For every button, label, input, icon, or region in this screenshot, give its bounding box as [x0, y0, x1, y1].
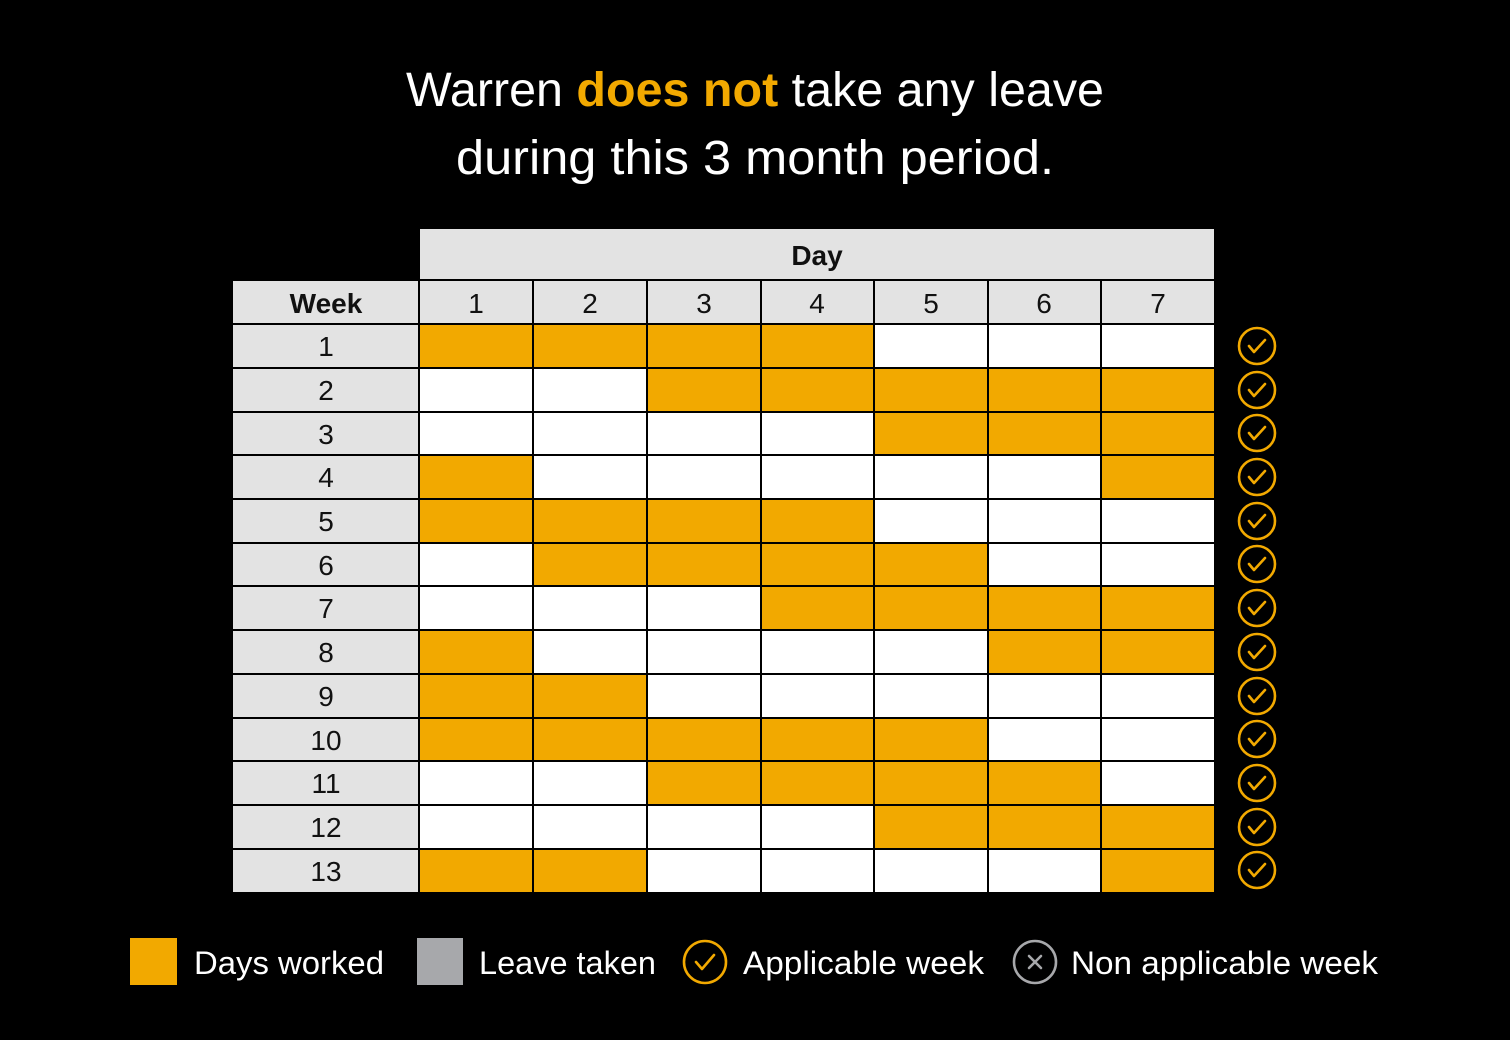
week 8	[420, 631, 1214, 673]
applicable week check icons	[1239, 328, 1275, 888]
title: Warren does not take any leave	[406, 64, 1104, 117]
legend: applicable week	[684, 941, 985, 983]
week 10	[420, 719, 1214, 760]
legend: days worked: Days worked	[194, 945, 384, 981]
week 3	[420, 413, 1214, 454]
week 5	[420, 500, 1214, 542]
header row: Week and day numbers: 1	[468, 288, 484, 319]
week label column: 4	[318, 462, 334, 493]
title: during this 3 month period.	[456, 132, 1054, 185]
header row: Week and day numbers: 7	[1150, 288, 1166, 319]
week 2	[420, 369, 1214, 411]
legend: non applicable week: Non applicable week	[1071, 945, 1379, 981]
legend: leave taken	[417, 938, 656, 985]
week label column: 3	[318, 419, 334, 450]
week 1	[420, 325, 1214, 367]
week label column: 9	[318, 681, 334, 712]
week 12	[420, 806, 1214, 848]
week 11	[420, 762, 1214, 804]
title	[406, 64, 1104, 185]
week label column: 8	[318, 637, 334, 668]
week 4	[420, 456, 1214, 498]
week label column: 11	[311, 768, 341, 799]
header row: Week and day numbers: 5	[923, 288, 939, 319]
week label column: 6	[318, 550, 334, 581]
week label column: 1	[318, 331, 334, 362]
header row: Week and day numbers: Week	[290, 288, 363, 319]
week 6	[420, 544, 1214, 585]
week label column: 2	[318, 375, 334, 406]
legend: applicable week: Applicable week	[743, 945, 985, 981]
header: Day	[420, 229, 1214, 279]
week 13	[420, 850, 1214, 892]
header row: Week and day numbers: 3	[696, 288, 712, 319]
header: Day: Day	[791, 240, 843, 271]
day cells grid	[420, 325, 1214, 892]
week 9	[420, 675, 1214, 717]
header row: Week and day numbers: 2	[582, 288, 598, 319]
week label column: 13	[310, 856, 342, 887]
week label column: 7	[318, 593, 334, 624]
legend: leave taken: Leave taken	[479, 945, 656, 981]
legend: days worked	[130, 938, 384, 985]
week 7	[420, 587, 1214, 629]
week label column: 12	[310, 812, 342, 843]
week label column	[233, 325, 418, 892]
legend	[130, 938, 1379, 985]
header row: Week and day numbers: 4	[809, 288, 825, 319]
header row: Week and day numbers	[233, 281, 1214, 323]
legend: non applicable week	[1014, 941, 1379, 983]
week label column: 10	[310, 725, 342, 756]
week label column: 5	[318, 506, 334, 537]
header row: Week and day numbers: 6	[1036, 288, 1052, 319]
table	[233, 229, 1214, 892]
